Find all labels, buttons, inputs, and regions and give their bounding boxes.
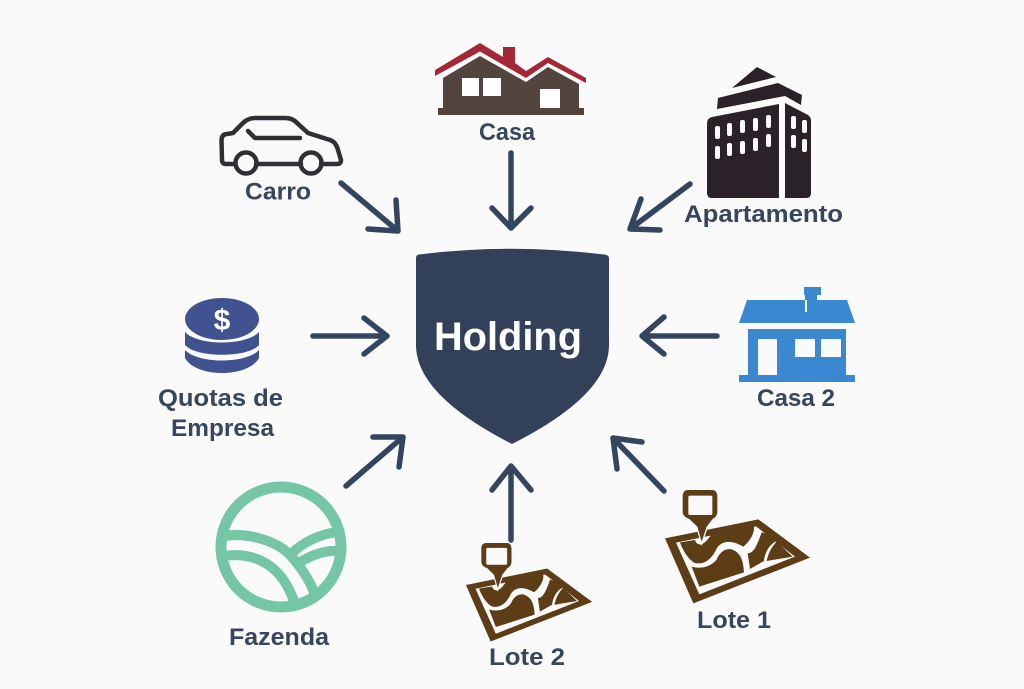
arrow: fazenda to holding — [346, 437, 403, 486]
icon: quotas coins — [185, 298, 259, 373]
icon: apartamento — [707, 67, 811, 198]
arrow: casa to holding — [492, 153, 531, 228]
arrow: apartamento to holding — [630, 184, 690, 230]
label: fazenda: Fazenda — [229, 624, 330, 651]
icon: casa 2 — [739, 287, 855, 382]
central shield — [416, 249, 609, 444]
label: quotas de empresa — [158, 385, 283, 442]
icon: lote 1 map — [665, 490, 810, 603]
label: apartamento: Apartamento — [684, 201, 843, 228]
arrow: quotas to holding — [313, 318, 387, 354]
icon: fazenda — [221, 487, 341, 607]
label: lote 2: Lote 2 — [489, 644, 565, 671]
arrow: casa 2 to holding — [642, 317, 717, 354]
arrow: lote 1 to holding — [613, 438, 664, 491]
label: casa: Casa — [479, 119, 536, 146]
label: quotas de empresa: Quotas de — [158, 385, 283, 412]
icon: casa — [435, 43, 586, 115]
icon: quotas coins: $ — [214, 304, 231, 337]
label: carro: Carro — [245, 178, 311, 206]
icon: carro — [222, 118, 341, 174]
shield title: Holding — [434, 315, 582, 359]
arrow: lote 2 to holding — [492, 466, 531, 540]
icon: lote 2 map — [466, 543, 592, 642]
label: lote 1: Lote 1 — [697, 607, 771, 634]
label: casa 2: Casa 2 — [757, 385, 835, 412]
arrow: carro to holding — [341, 183, 398, 231]
label: quotas de empresa: Empresa — [171, 415, 275, 442]
